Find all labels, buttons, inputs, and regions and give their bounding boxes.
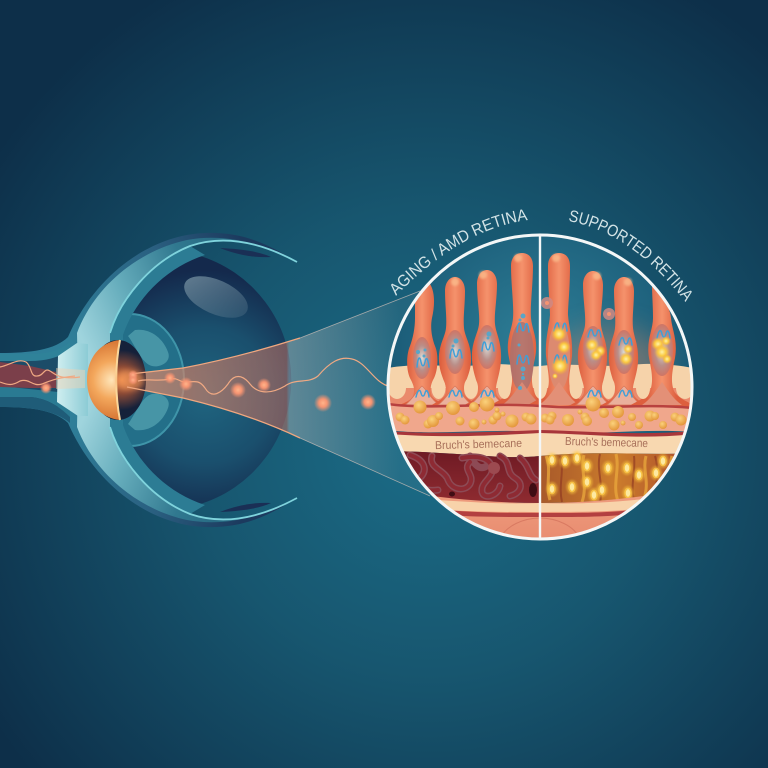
- Bruch's membrane band: [388, 430, 694, 457]
- center divider: [539, 235, 541, 539]
- sclera upper: [0, 233, 297, 380]
- salmon arches band: [390, 388, 690, 404]
- inset circle border: [388, 235, 692, 539]
- cream arches between cells: [390, 379, 690, 399]
- cell 1: [402, 284, 438, 405]
- ciliary body: [76, 314, 184, 446]
- cell 7: [600, 277, 639, 406]
- cell 2: [432, 277, 472, 405]
- sclera lower: [0, 380, 297, 527]
- pigment band: [388, 404, 694, 433]
- cell 8: [631, 286, 690, 406]
- cell 6: [569, 271, 608, 406]
- globe: [123, 255, 291, 505]
- heading: aging / AMD retina: AGING / AMD RETINA: [391, 210, 528, 296]
- cell 4: [494, 253, 539, 404]
- eye cross-section: [0, 233, 430, 527]
- lens: [87, 340, 120, 420]
- photoreceptors left: [402, 253, 539, 406]
- beam through cornea: [56, 368, 85, 389]
- yellow lipid droplets in cells: [551, 326, 672, 379]
- light beam cone from lens to inset: [127, 291, 430, 496]
- warm glow right half: [543, 312, 678, 366]
- blue mitochondria squiggles: [416, 323, 670, 397]
- cell head highlights: [451, 254, 632, 286]
- pupil: [90, 340, 146, 420]
- capillary glow: [546, 451, 668, 502]
- cell 3: [466, 270, 502, 404]
- upper cream layer: [390, 364, 690, 388]
- beam edge lines: [127, 291, 430, 496]
- retina inset circle: [388, 235, 696, 545]
- photoreceptors right: [525, 253, 696, 407]
- blue droplets: [416, 314, 526, 390]
- cell 5: [530, 253, 580, 406]
- heading: supported retina: SUPPORTED RETINA: [569, 210, 692, 302]
- yellow deposits: [396, 396, 686, 430]
- choroid right: healthy vessels: [541, 450, 675, 503]
- pupil glow: [116, 370, 144, 390]
- Bruch's membrane label right: Bruch's bemecane: [565, 436, 648, 450]
- choroid left: damaged vessels: [404, 451, 539, 503]
- lower retinal layers: [437, 496, 644, 538]
- glowing light dots: [40, 370, 376, 412]
- cornea: [57, 343, 88, 416]
- glowing capillaries: [549, 454, 666, 500]
- globe highlight: [178, 268, 254, 326]
- floating cells: [541, 297, 615, 320]
- light wave: [0, 358, 388, 394]
- lens edge: [116, 340, 120, 420]
- Bruch's membrane label left: Bruch's bemecane: [435, 438, 522, 452]
- optic nerve: [0, 342, 72, 423]
